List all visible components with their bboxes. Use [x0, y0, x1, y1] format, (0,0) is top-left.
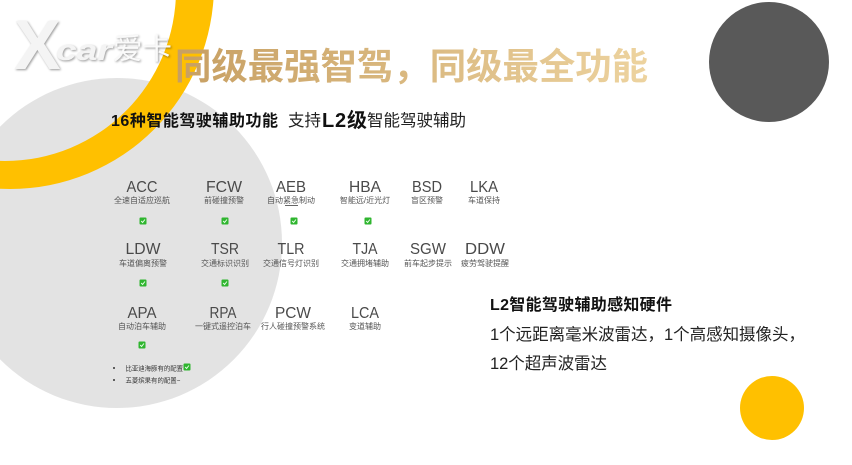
feature: SGW: SGW	[410, 241, 447, 258]
feature: APA	[118, 305, 166, 331]
feature: PCW: 行人碰撞预警系统	[261, 321, 325, 331]
feature: HBA: HBA	[349, 179, 381, 196]
feature: LCA: LCA	[351, 305, 379, 322]
hardware text block	[490, 295, 805, 373]
subtitle: 16种智能驾驶辅助功能	[111, 111, 278, 130]
feature: APA: 自动泊车辅助	[118, 321, 166, 331]
feature: TLR: 交通信号灯识别	[263, 258, 319, 268]
feature: TJA: TJA	[352, 241, 378, 258]
hardware text block: 12个超声波雷达	[490, 354, 607, 373]
feature: LDW: LDW	[126, 241, 161, 258]
decorative yellow ring	[0, 0, 214, 189]
feature row 2	[119, 241, 509, 268]
feature: BSD: BSD	[412, 179, 442, 196]
feature: SGW: 前车起步提示	[404, 258, 452, 268]
watermark logo: Xcar爱卡: car	[56, 35, 114, 67]
feature: TSR	[201, 241, 249, 268]
feature: PCW: PCW	[275, 305, 312, 322]
feature: TJA	[341, 241, 389, 268]
legend	[113, 364, 190, 384]
hardware text block: L2智能驾驶辅助感知硬件	[490, 295, 672, 314]
feature: TSR: TSR	[211, 241, 239, 258]
check marks row 2	[140, 280, 228, 286]
feature: FCW: FCW	[206, 179, 243, 196]
feature: LKA: LKA	[470, 179, 498, 196]
feature: TLR: TLR	[278, 241, 304, 258]
feature: DDW	[461, 241, 509, 268]
feature: RPA: 一键式遥控泊车	[195, 321, 251, 331]
watermark logo: Xcar爱卡: 爱卡	[113, 33, 172, 66]
check marks row 1	[140, 218, 372, 224]
watermark logo: Xcar爱卡	[14, 6, 172, 84]
feature: FCW	[204, 179, 244, 205]
legend: 五菱缤果有的配置~	[126, 376, 181, 384]
feature: RPA: RPA	[210, 305, 237, 322]
feature: PCW	[261, 305, 325, 331]
hardware text block: 1个远距离毫米波雷达，1个高感知摄像头，	[490, 325, 805, 344]
feature: BSD	[411, 179, 443, 205]
feature: ACC: 全速自适应巡航	[114, 195, 170, 205]
subtitle: 智能驾驶辅助	[367, 111, 466, 130]
feature: RPA	[195, 305, 251, 331]
feature: HBA: 智能远/近光灯	[340, 195, 390, 205]
feature: LCA	[349, 305, 381, 331]
decorative yellow circle	[740, 376, 804, 440]
feature: HBA	[340, 179, 390, 205]
subtitle	[111, 109, 466, 132]
check mark row 3	[138, 342, 146, 348]
feature: LKA	[468, 179, 500, 205]
legend: 比亚迪海豚有的配置	[126, 364, 184, 372]
title: 同级最强智驾，同级最全功能	[175, 46, 648, 87]
feature: SGW	[404, 241, 452, 268]
feature: ACC: ACC	[126, 179, 158, 196]
feature row 3	[118, 305, 381, 331]
feature: TJA: 交通拥堵辅助	[341, 258, 389, 268]
feature: AEB: AEB	[276, 179, 306, 196]
feature row 1	[114, 179, 500, 206]
feature: BSD: 盲区预警	[411, 195, 443, 205]
subtitle: L2级	[322, 109, 367, 132]
watermark logo: Xcar爱卡: X	[14, 6, 61, 84]
feature: APA: APA	[128, 305, 157, 322]
feature: LKA: 车道保持	[468, 195, 500, 205]
feature: DDW: DDW	[465, 241, 506, 258]
feature: LDW	[119, 241, 167, 268]
feature: LCA: 变道辅助	[349, 321, 381, 331]
feature: AEB	[267, 179, 315, 206]
feature: FCW: 前碰撞预警	[204, 195, 244, 205]
decorative gray circle	[0, 78, 282, 408]
feature: DDW: 疲劳驾驶提醒	[461, 258, 509, 268]
decorative dark circle	[709, 2, 829, 122]
feature: TLR	[263, 241, 319, 268]
feature: ACC	[114, 179, 170, 205]
feature: LDW: 车道偏离预警	[119, 258, 167, 268]
feature: AEB: 自动紧急制动	[267, 195, 315, 205]
feature: TSR: 交通标识识别	[201, 258, 249, 268]
subtitle: 支持	[288, 111, 321, 130]
